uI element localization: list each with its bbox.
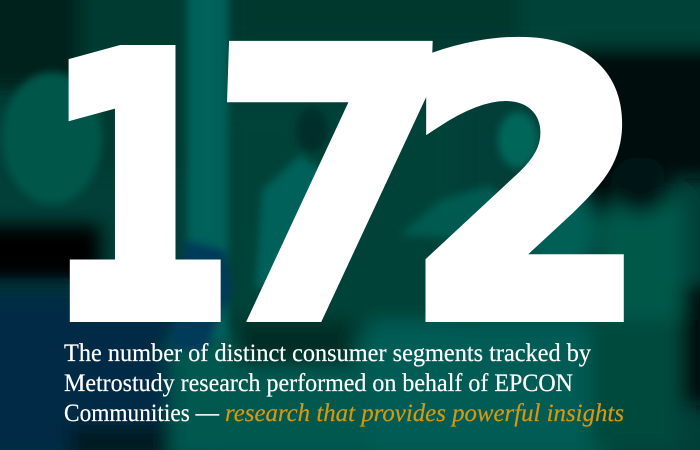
description text xyxy=(64,340,624,427)
line 1: The number of distinct consumer segments tracked by xyxy=(64,340,591,367)
big number 172 xyxy=(44,0,645,405)
line 2: Metrostudy research performed on behalf of EPCON xyxy=(64,370,573,397)
highlighted italic phrase: research that provides powerful insights xyxy=(225,400,624,427)
line 3: Communities — xyxy=(64,400,220,427)
